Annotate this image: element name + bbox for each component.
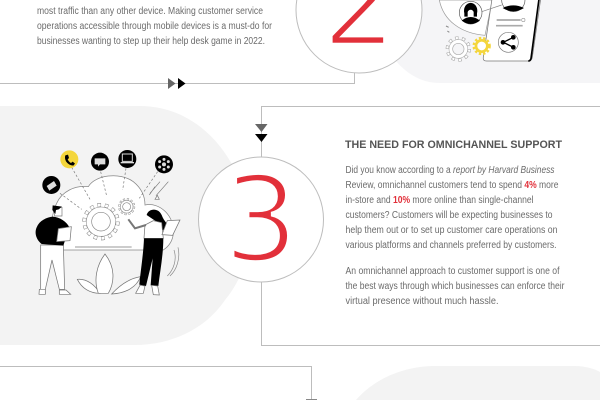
illustration: phone with support contacts: [439, 0, 541, 61]
text block: section 3 second paragraph: virtual presence without much hassle.: [346, 296, 498, 307]
dashed connectors: [60, 167, 158, 209]
person: man with clipboard: [36, 205, 71, 294]
small dots: [446, 26, 449, 32]
connector: section 4 outline: [0, 366, 312, 400]
speech bubble arc: [439, 0, 492, 35]
cloud base line: [75, 245, 132, 248]
text block: section 3 second paragraph: [346, 266, 565, 307]
icon: network dots: [155, 155, 173, 173]
small gear: [119, 199, 134, 214]
cloud: [52, 176, 173, 250]
text block: section 2 body: operations accessible through mobile devices is a must-do for: [37, 21, 273, 32]
person: woman with tablet: [128, 210, 180, 295]
text block: section 3 first paragraph: [346, 165, 559, 251]
text block: section 3 first paragraph: in-store and 10% more online than single-channel: [346, 195, 534, 206]
text block: section 3 second paragraph: the best ways through which businesses can enforce their: [346, 281, 565, 292]
large gear: [84, 205, 118, 238]
connector: section 3 outline: [262, 106, 600, 346]
icon: envelope: [42, 176, 60, 194]
text block: section 3 second paragraph: An omnichannel approach to customer support is one of: [346, 266, 560, 277]
gear outline: [447, 38, 469, 60]
text block: section 3 first paragraph: various platforms and channels preferred by customers.: [346, 240, 556, 251]
icon: chat: [91, 153, 109, 171]
share icon: [498, 32, 518, 52]
text block: section 2 body: most traffic than any other device. Making customer service: [37, 6, 263, 17]
motion arcs: [167, 247, 179, 276]
illustration: people around support cloud: [36, 150, 180, 295]
text block: section 2 body: [37, 6, 273, 47]
number badge 3: [198, 152, 324, 290]
number badge 3: 3: [223, 152, 299, 290]
text block: section 3 first paragraph: Did you know according to a report by Harvard Business: [346, 165, 554, 176]
arrow: section 4 arrow tip: [306, 399, 317, 400]
panel: section 3 background blob: [0, 106, 250, 345]
avatar second agent: [502, 0, 525, 12]
icon: phone yellow: [60, 150, 78, 168]
gear yellow: [474, 38, 490, 54]
text block: section 3 first paragraph: help them out or to set up customer care operations on: [346, 225, 558, 236]
text block: section 3 first paragraph: Review, omnichannel customers tend to spend 4% more: [346, 180, 559, 191]
icon: laptop: [118, 150, 136, 168]
signal marks: [149, 182, 168, 199]
text block: section 3 first paragraph: customers? Customers will be expecting businesses to: [346, 210, 553, 221]
leaves: [77, 254, 141, 294]
arrow: section 3 double arrow: [255, 124, 268, 142]
phone: [483, 0, 541, 61]
arrow: section 2 double arrow: [168, 78, 186, 89]
avatar headset agent: [459, 1, 502, 24]
panel: section 4 background blob: [356, 366, 600, 400]
text block: section 2 body: businesses wanting to step up their help desk game in 2022.: [37, 36, 265, 47]
panel: section 2 background blob: [372, 0, 600, 83]
number badge 2: [296, 0, 422, 74]
connector: section 2 outline: [0, 72, 354, 84]
heading: the need for omnichannel support: THE NEED FOR OMNICHANNEL SUPPORT: [345, 139, 562, 151]
